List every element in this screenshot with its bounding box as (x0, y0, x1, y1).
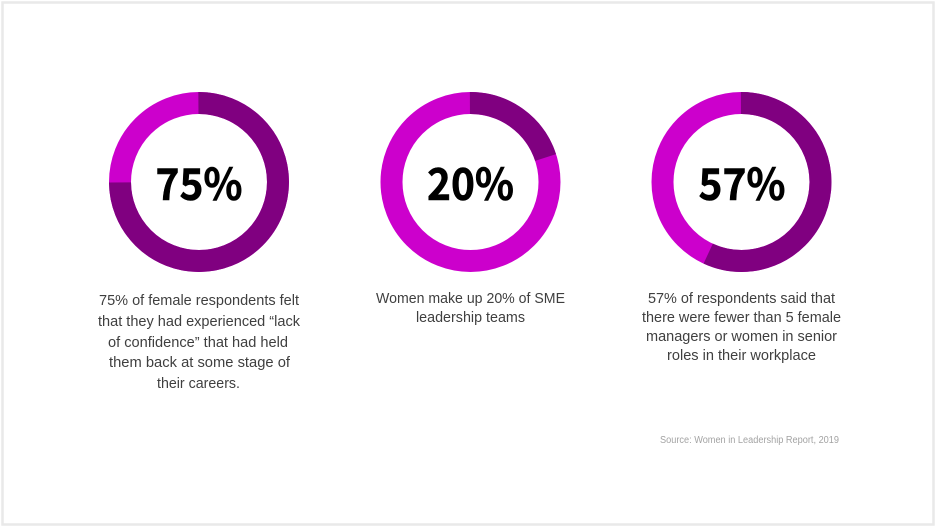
description: senior roles: 57% of respondents said that (648, 291, 835, 307)
description: lack of confidence: them back at some stage of (109, 355, 291, 371)
description: lack of confidence: their careers. (157, 376, 240, 392)
panel: 75 percent statistic (98, 103, 301, 392)
description: SME leadership teams: Women make up 20% of SME (376, 291, 565, 307)
panel: 20 percent statistic (376, 103, 565, 326)
description: senior roles (642, 291, 841, 364)
value: 20%: 20% (427, 149, 514, 213)
donut chart: 75% (120, 103, 278, 261)
source note: Source: Women in Leadership Report, 2019 (660, 435, 839, 446)
value: 57%: 57% (698, 149, 786, 213)
panel: 57 percent statistic (642, 103, 841, 364)
description: lack of confidence: that they had experienced “lack (98, 314, 301, 330)
description: senior roles: roles in their workplace (667, 348, 816, 364)
description: SME leadership teams (376, 291, 565, 326)
description: senior roles: there were fewer than 5 female (642, 310, 841, 326)
description: lack of confidence: 75% of female respondents felt (99, 293, 299, 309)
value: 75%: 75% (156, 149, 242, 213)
donut chart: 57% (662, 103, 820, 261)
description: senior roles: managers or women in senior (646, 329, 837, 345)
description: lack of confidence: of confidence” that had held (108, 335, 288, 351)
donut chart: 20% (392, 103, 550, 261)
description: SME leadership teams: leadership teams (416, 310, 525, 326)
description: lack of confidence (98, 293, 301, 392)
